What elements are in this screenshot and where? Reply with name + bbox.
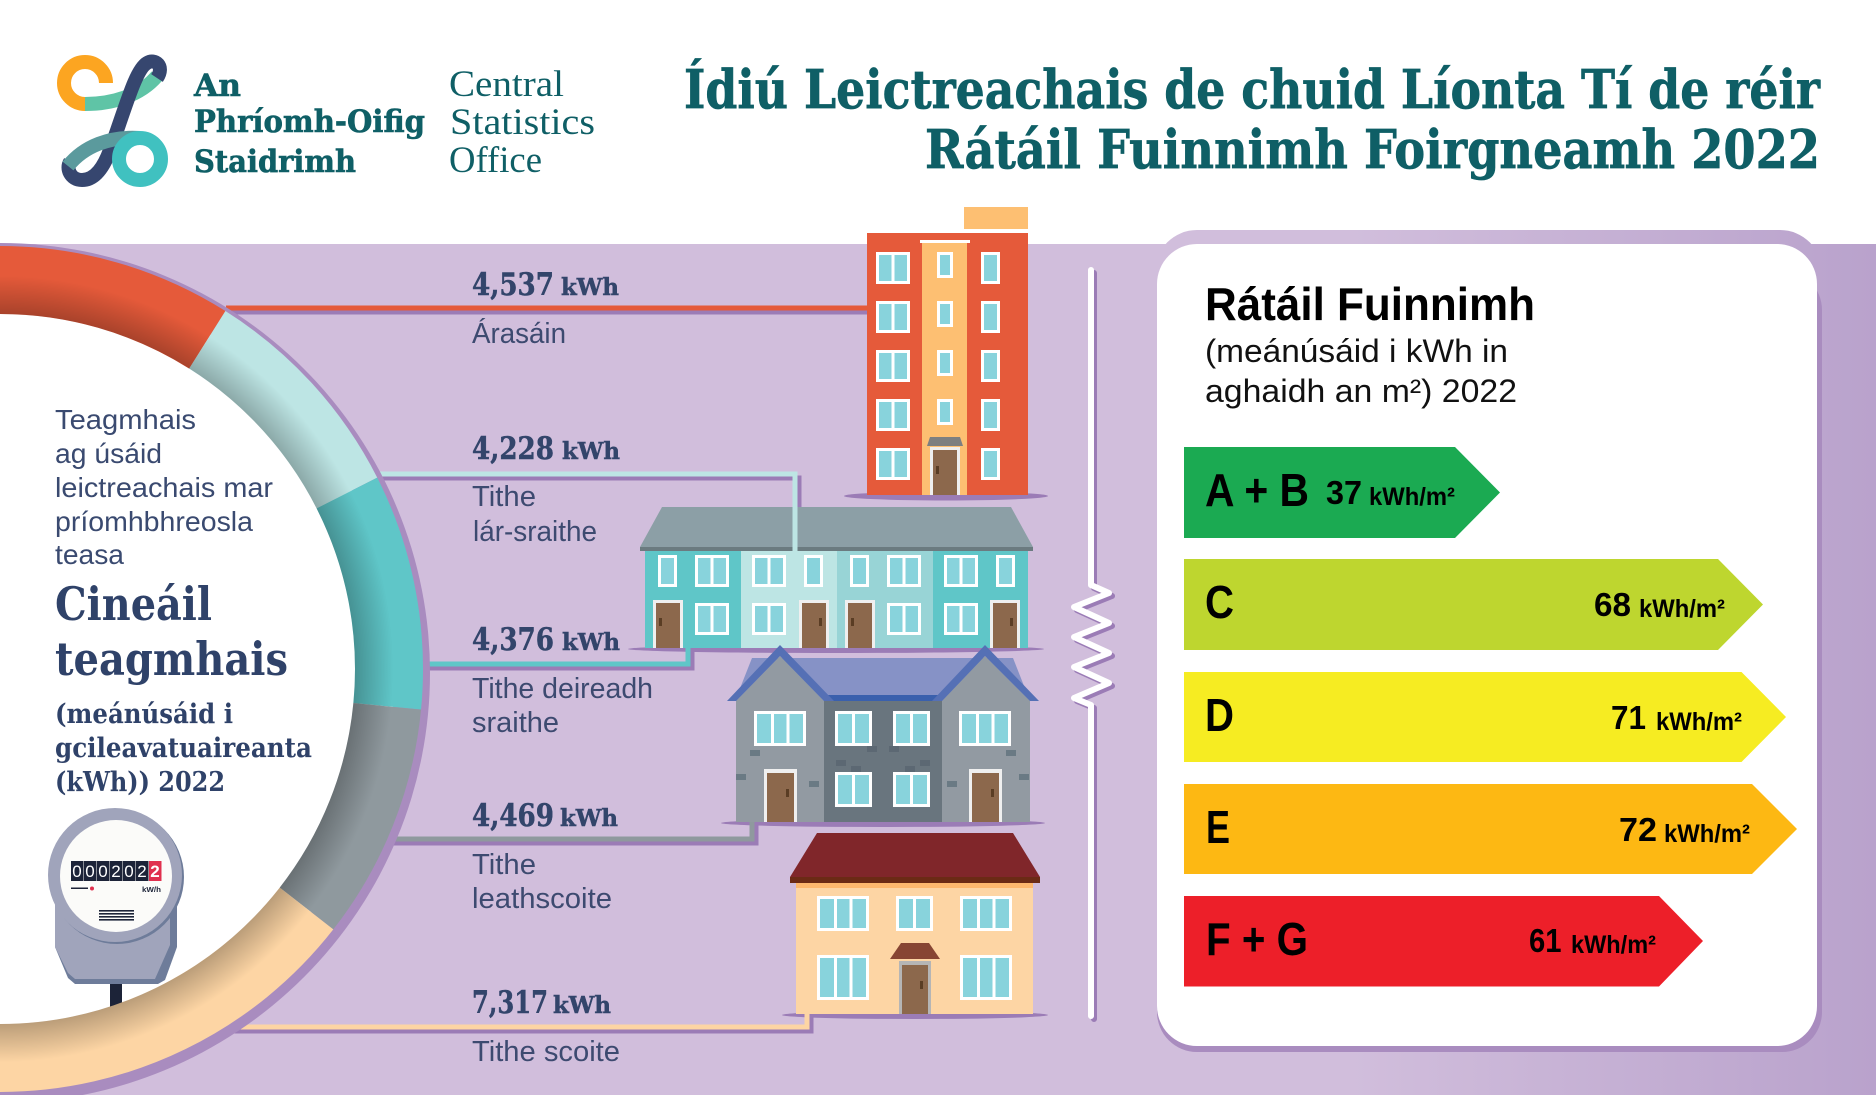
rating bar: F + G: kWh/m²	[1571, 931, 1656, 959]
icon: electricity meter: 2	[150, 862, 160, 881]
rating bar: E: 72	[1619, 811, 1657, 848]
ring centre text	[55, 404, 312, 798]
rating bar: C	[1184, 559, 1763, 650]
dwelling label: end-terrace: sraithe	[472, 707, 559, 739]
dwelling label: apartments: Árasáin	[472, 317, 566, 350]
dwelling label: semi-detached: 4,469	[472, 798, 554, 834]
rating bar: E	[1184, 784, 1797, 874]
rating bar: F + G	[1184, 896, 1703, 986]
rating bar: A + B	[1184, 447, 1500, 538]
rating bar: A + B: kWh/m²	[1369, 483, 1455, 511]
rating bar: E: E	[1206, 801, 1230, 853]
rating bar: A + B: 37	[1326, 474, 1362, 511]
logo text: English name: Office	[449, 140, 542, 181]
dwelling type subheading: gcileavatuaireanta	[55, 733, 312, 764]
logo text: Irish name: An	[193, 68, 241, 104]
panel: energy rating	[1155, 230, 1822, 1052]
dwelling label: end-terrace: 4,376	[472, 622, 554, 658]
dwelling label: semi-detached	[472, 798, 618, 915]
rating bar: D: D	[1205, 689, 1234, 741]
logo text: Irish name: Phríomh-Oifig	[194, 104, 425, 140]
rating bar: D: kWh/m²	[1656, 708, 1742, 736]
building: apartment block	[844, 207, 1048, 500]
panel heading: (meánúsáid i kWh in	[1205, 333, 1508, 369]
segmented ring	[0, 280, 389, 1058]
panel heading	[1205, 278, 1535, 409]
intro text: Teagmhais	[55, 404, 196, 435]
connector shadows	[229, 312, 871, 1031]
building: detached house	[782, 833, 1048, 1019]
dwelling label: mid-terrace	[472, 431, 620, 548]
rating bar: F + G: F + G	[1206, 913, 1308, 965]
icon: electricity meter: 0	[72, 862, 82, 881]
rating bar: C: 68	[1594, 586, 1631, 623]
dwelling label: mid-terrace: kWh	[562, 438, 620, 465]
dwelling type subheading: (kWh)) 2022	[55, 767, 225, 798]
dwelling type heading: teagmhais	[55, 632, 288, 686]
dwelling label: semi-detached: Tithe	[472, 849, 536, 881]
dwelling type subheading	[55, 699, 312, 798]
dwelling label: apartments: 4,537	[472, 267, 554, 303]
logo text: English name	[449, 64, 595, 181]
dwelling label: end-terrace: Tithe deireadh	[472, 673, 653, 705]
dwelling type subheading: (meánúsáid i	[55, 699, 233, 730]
rating bar: E: kWh/m²	[1664, 820, 1750, 848]
rating bar: C: C	[1205, 576, 1234, 628]
icon: electricity meter: 2	[111, 862, 121, 881]
axis break line	[1074, 270, 1112, 1019]
dwelling label: semi-detached: kWh	[560, 805, 618, 832]
intro text: príomhbhreosla	[55, 506, 253, 537]
dwelling type heading: Cineáil	[55, 577, 212, 631]
dwelling label: detached	[472, 985, 620, 1068]
purple background band	[0, 244, 1876, 1095]
icon: electricity meter: 0	[124, 862, 134, 881]
logo text: English name: Statistics	[450, 102, 595, 143]
centre white disc	[0, 274, 395, 1064]
logo text: Irish name	[193, 68, 425, 180]
ring outer purple edge	[0, 243, 430, 1095]
panel heading: Rátáil Fuinnimh	[1205, 278, 1535, 330]
building: terraced row	[628, 507, 1044, 653]
icon: electricity meter: 0	[98, 862, 108, 881]
dwelling label: apartments: kWh	[561, 274, 619, 301]
intro text	[55, 404, 273, 570]
building: semi-detached pair	[721, 645, 1045, 827]
connectors from ring to buildings	[225, 308, 867, 1027]
dwelling label: mid-terrace: Tithe	[472, 481, 536, 513]
logo text: Irish name: Staidrimh	[194, 144, 356, 180]
icon: electricity meter: 0	[85, 862, 95, 881]
rating bar: D	[1184, 672, 1786, 762]
dwelling label: semi-detached: leathscoite	[472, 883, 612, 915]
dwelling label: detached: 7,317	[472, 985, 548, 1021]
dwelling type heading	[55, 577, 288, 686]
dwelling label: end-terrace	[472, 622, 653, 739]
rating bar: A + B: A + B	[1205, 464, 1309, 516]
header logo	[64, 61, 595, 181]
dwelling label: mid-terrace: lár-sraithe	[473, 516, 597, 548]
dwelling label: detached: Tithe scoite	[472, 1036, 620, 1068]
icon: electricity meter	[48, 808, 184, 1015]
dwelling label: apartments	[472, 267, 619, 350]
dwelling label: mid-terrace: 4,228	[472, 431, 554, 467]
dwelling label: end-terrace: kWh	[562, 629, 620, 656]
title	[684, 59, 1821, 181]
dwelling label: detached: kWh	[553, 992, 611, 1019]
logo text: English name: Central	[449, 64, 564, 105]
intro text: ag úsáid	[55, 438, 162, 469]
rating bar: F + G: 61	[1529, 922, 1562, 959]
icon: CSO knot symbol	[64, 61, 161, 180]
intro text: leictreachais mar	[55, 472, 273, 503]
rating bar: C: kWh/m²	[1639, 595, 1725, 623]
icon: electricity meter: 2	[137, 862, 147, 881]
intro text: teasa	[55, 539, 124, 570]
icon: electricity meter: kW/h	[142, 885, 161, 894]
rating bar: D: 71	[1611, 699, 1646, 736]
panel heading: aghaidh an m²) 2022	[1205, 373, 1517, 409]
